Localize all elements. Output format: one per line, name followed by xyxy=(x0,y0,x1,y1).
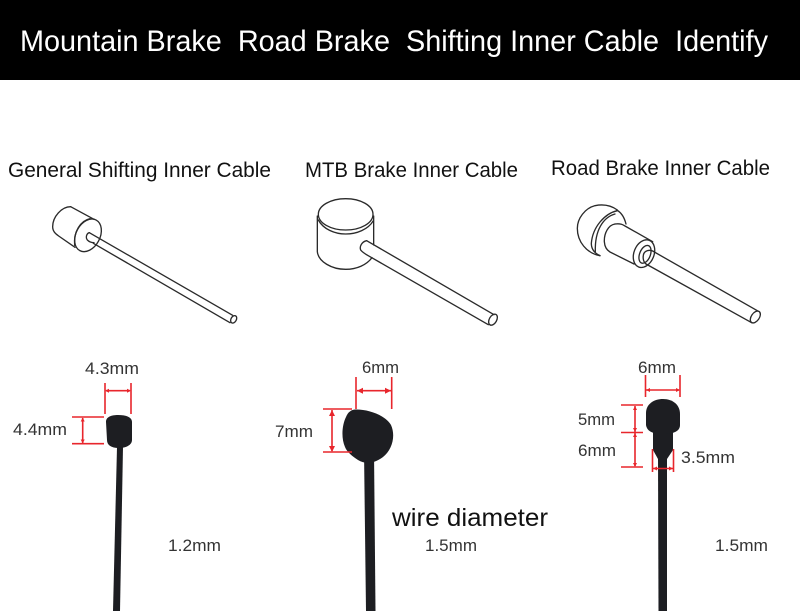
dimension: 6mm width: 6mm xyxy=(362,358,399,377)
icon: MTB cable line drawing xyxy=(317,199,499,327)
dimension: 5mm and 6mm heights xyxy=(578,405,643,467)
dimension: 6mm head width: 6mm xyxy=(638,358,676,377)
icon: road cable line drawing xyxy=(577,205,762,325)
label: 1.2mm wire: 1.2mm xyxy=(168,536,221,555)
dimension: 3.5mm neck: 3.5mm xyxy=(681,448,735,467)
label: 1.5mm road wire: 1.5mm xyxy=(715,536,768,555)
photo: MTB cable black head and wire xyxy=(342,409,393,611)
photo: road cable black head and wire xyxy=(646,399,680,611)
title banner: Mountain Brake Road Brake Shifting Inner Cable Identify xyxy=(20,25,768,58)
heading: general shifting cable: General Shifting Inner Cable xyxy=(8,159,271,182)
dimension: 5mm and 6mm heights: 5mm xyxy=(578,410,615,429)
dimension: 4.3mm width: 4.3mm xyxy=(85,359,139,378)
dimension: 3.5mm neck xyxy=(652,448,735,472)
dimension: 6mm width xyxy=(356,358,399,409)
dimension: 4.4mm height xyxy=(13,417,104,444)
dimension: 7mm height: 7mm xyxy=(275,422,313,441)
dimension: 7mm height xyxy=(275,409,352,452)
label: 1.5mm MTB wire: 1.5mm xyxy=(425,536,477,555)
photo: shifting cable black head and wire xyxy=(106,415,132,611)
heading: MTB brake cable: MTB Brake Inner Cable xyxy=(305,159,518,182)
dimension: 5mm and 6mm heights: 6mm xyxy=(578,441,616,460)
heading: road brake cable: Road Brake Inner Cable xyxy=(551,157,770,180)
label: wire diameter: wire diameter xyxy=(391,504,548,532)
dimension: 6mm head width xyxy=(638,358,680,397)
dimension: 4.3mm width xyxy=(85,359,139,414)
title banner xyxy=(0,0,800,80)
icon: shifting cable line drawing xyxy=(53,207,238,324)
dimension: 4.4mm height: 4.4mm xyxy=(13,420,67,439)
